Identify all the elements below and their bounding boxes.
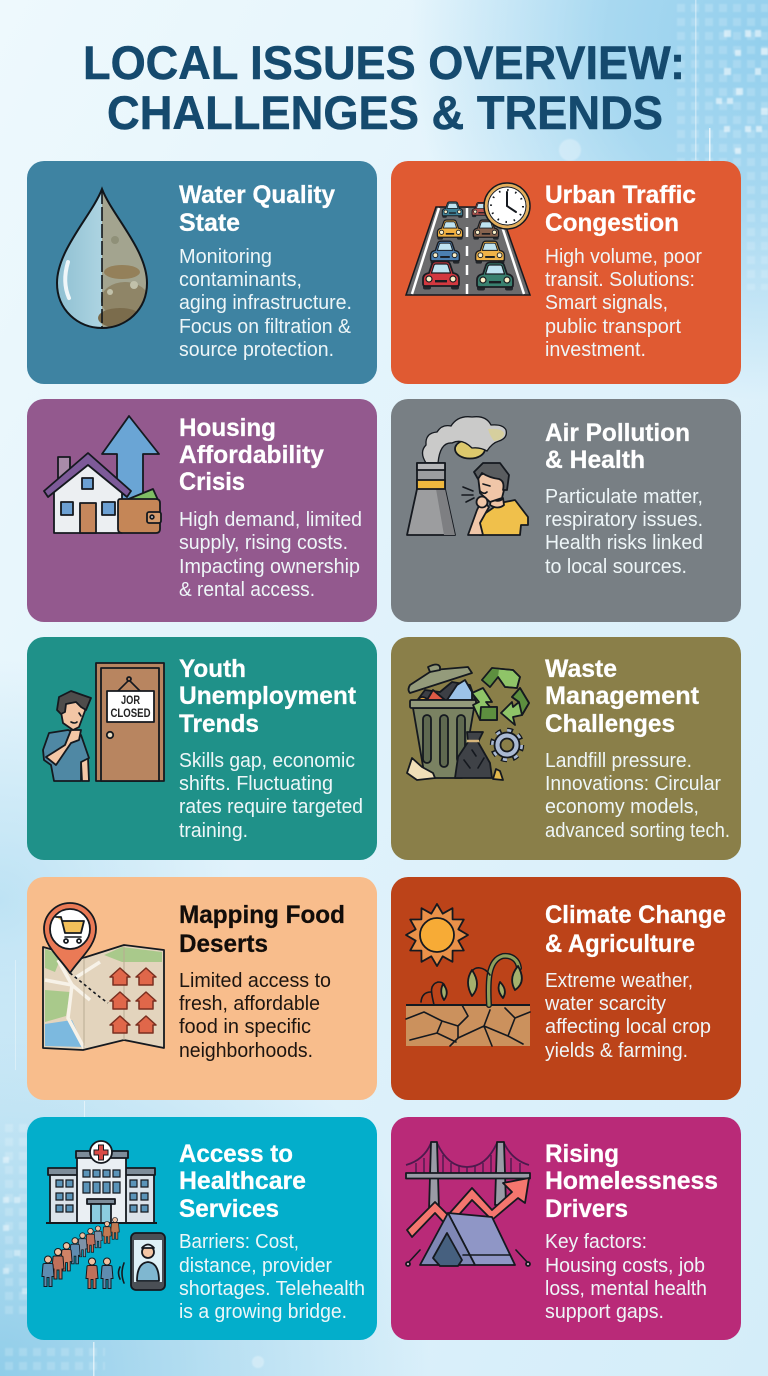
heading: Management [545,682,700,710]
icon: closed door and person: JOR [121,695,141,707]
heading: Crisis [179,468,245,496]
heading [545,655,700,738]
text block: affecting local crop [545,1015,711,1038]
heading: Homelessness [545,1167,718,1195]
panel: water quality [27,161,377,384]
text block: High volume, poor [545,245,702,268]
heading: Trends [179,710,259,738]
heading [545,901,726,958]
heading: Youth [179,655,246,683]
text block: food in specific [179,1015,311,1038]
heading: & Agriculture [545,930,695,958]
heading: Mapping Food [179,901,345,929]
text block [179,1230,365,1323]
icon: house, arrow and wallet [44,416,161,533]
heading: Affordability [179,441,324,469]
panel: air pollution [391,399,741,622]
heading: State [179,209,240,237]
icon: sun, cracked soil and wilted plants [406,904,530,1046]
panel: housing [27,399,377,622]
title: LOCAL ISSUES OVERVIEW: [83,36,685,89]
panel: waste management [391,637,741,860]
text block: supply, rising costs. [179,531,348,554]
title: CHALLENGES & TRENDS [107,86,663,139]
text block [545,749,730,842]
heading: & Health [545,446,645,474]
heading [179,901,345,958]
panel: food deserts [27,877,377,1100]
title [83,36,685,139]
text block [545,1230,707,1323]
heading: Climate Change [545,901,726,929]
text block: Focus on filtration & [179,315,351,338]
text block: Impacting ownership [179,555,360,578]
text block: distance, provider [179,1254,332,1277]
panel: homelessness [391,1117,741,1340]
text block: transit. Solutions: [545,268,695,291]
text block: source protection. [179,338,334,361]
heading: Unemployment [179,682,357,710]
panel: healthcare access [27,1117,377,1340]
text block: fresh, affordable [179,992,320,1015]
text block: Limited access to [179,969,331,992]
text block: Extreme weather, [545,969,693,992]
text block [179,508,362,601]
text block: Skills gap, economic [179,749,355,772]
text block: Health risks linked [545,531,703,554]
icon: closed door and person: CLOSED [110,708,150,720]
text block: contaminants, [179,268,302,291]
heading: Rising [545,1140,619,1168]
text block: Landfill pressure. [545,749,692,772]
text block: support gaps. [545,1300,664,1323]
heading [179,1140,306,1223]
icon: trash can, recycling and gear [407,664,529,780]
heading: Housing [179,414,276,442]
panel: youth unemployment [27,637,377,860]
text block: yields & farming. [545,1039,688,1062]
text block [179,969,331,1062]
text block: Innovations: Circular [545,772,721,795]
heading: Challenges [545,710,675,738]
heading: Urban Traffic [545,181,696,209]
icon: water drop [57,185,150,335]
heading: Drivers [545,1195,628,1223]
heading: Congestion [545,209,679,237]
text block: Smart signals, [545,291,668,314]
heading [179,655,357,738]
text block [179,749,363,842]
icon: hospital, queue and telehealth phone [42,1141,165,1290]
heading [545,419,690,474]
icon: traffic and clock [406,183,530,295]
text block: investment. [545,338,646,361]
text block: economy models, [545,795,699,818]
icon: map with pin [43,903,164,1050]
text block: Particulate matter, [545,485,703,508]
text block: Key factors: [545,1230,647,1253]
text block: advanced sorting tech. [545,819,730,842]
text block: loss, mental health [545,1277,707,1300]
icon: smokestack and coughing person [407,417,528,535]
text block: High demand, limited [179,508,362,531]
panel: climate and agriculture [391,877,741,1100]
text block: aging infrastructure. [179,291,352,314]
heading [179,181,335,237]
panel: urban traffic [391,161,741,384]
text block: & rental access. [179,578,315,601]
text block: shortages. Telehealth [179,1277,365,1300]
text block: to local sources. [545,555,687,578]
text block [179,245,352,361]
text block: public transport [545,315,681,338]
heading: Waste [545,655,617,683]
text block: shifts. Fluctuating [179,772,333,795]
text block [545,485,703,578]
text block: Barriers: Cost, [179,1230,299,1253]
icon: closed door and person [43,663,164,781]
heading: Water Quality [179,181,335,209]
text block [545,245,702,361]
heading [545,1140,718,1223]
text block: neighborhoods. [179,1039,313,1062]
heading: Air Pollution [545,419,690,447]
text block: water scarcity [544,992,667,1015]
heading [179,414,324,496]
text block: training. [179,819,248,842]
heading [545,181,696,237]
icon: bridge, rising arrow and tent [406,1142,530,1266]
heading: Healthcare [179,1167,306,1195]
text block: rates require targeted [179,795,363,818]
text block: respiratory issues. [545,508,703,531]
text block: Housing costs, job [545,1254,705,1277]
heading: Services [179,1195,279,1223]
text block: Monitoring [179,245,272,268]
text block: is a growing bridge. [179,1300,347,1323]
text block [544,969,711,1062]
heading: Access to [179,1140,293,1168]
heading: Deserts [179,930,268,958]
